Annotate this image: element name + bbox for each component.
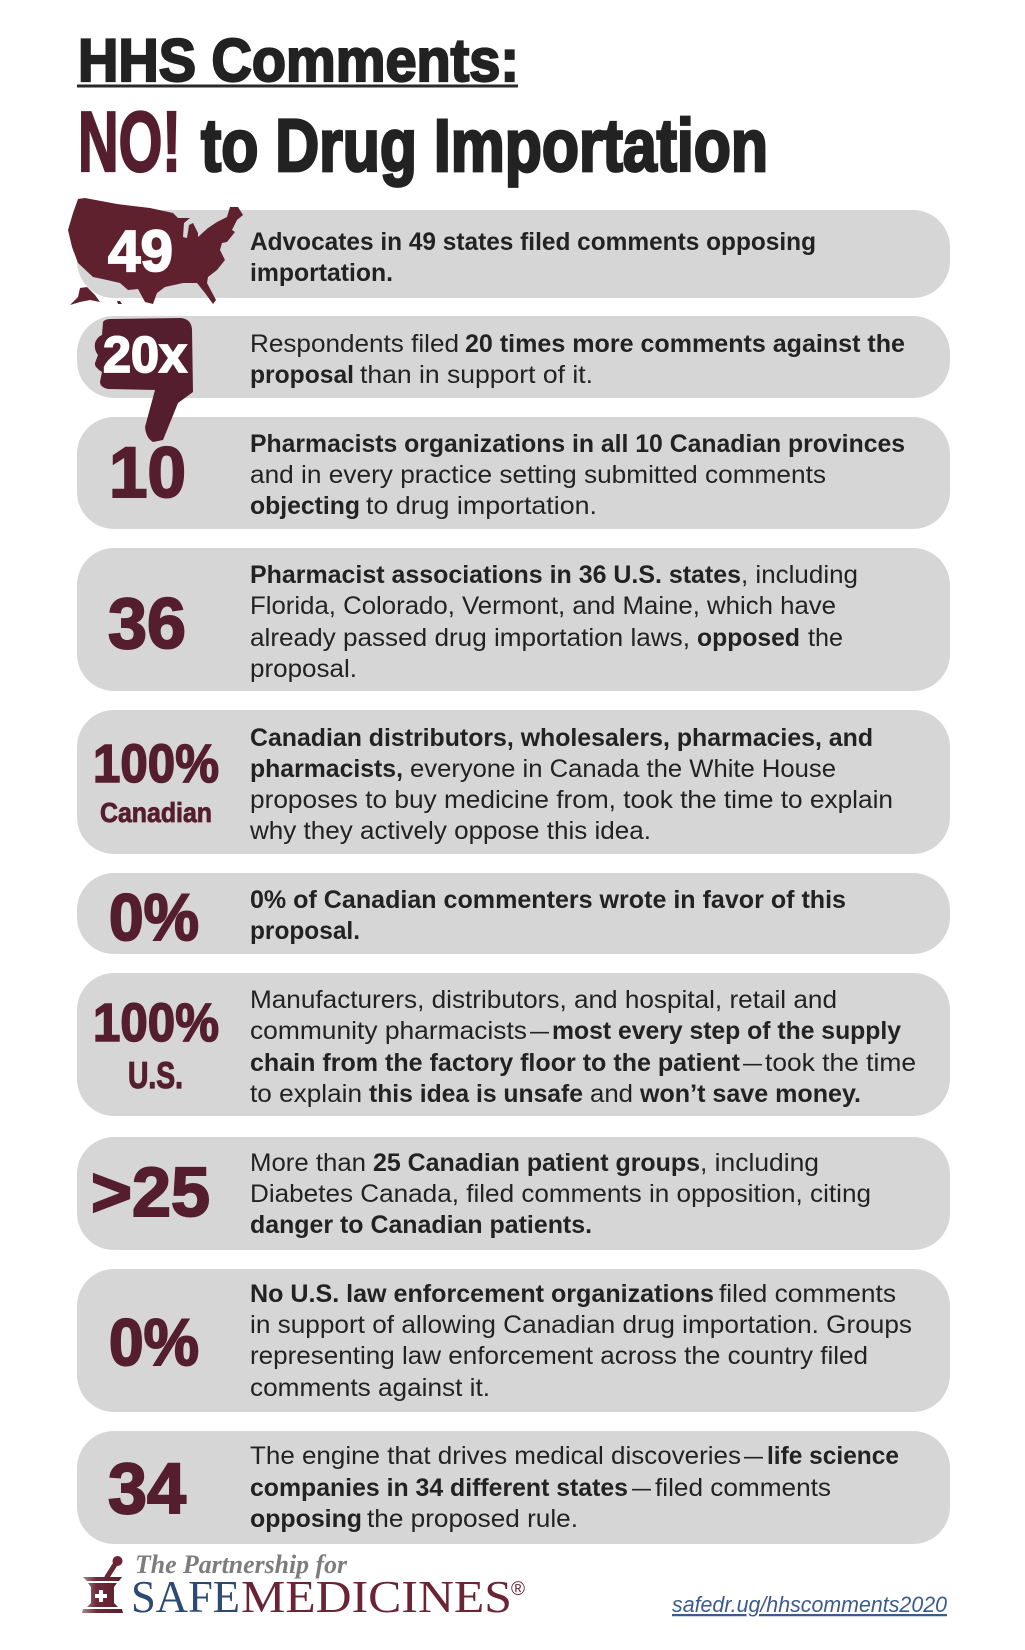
panel: 36 U.S. states: [77, 548, 950, 691]
big number: 0%: 0%: [109, 880, 199, 954]
text: supply chain: won’t save money.: [639, 1080, 861, 1108]
text: supply chain: Manufacturers, distributors, and hospital, retail and: [250, 986, 837, 1014]
text: 0% of Canadian commenters: [250, 886, 846, 945]
text: life science companies: filed comments: [655, 1474, 831, 1502]
text: 10 provinces: Pharmacists organizations in all 10 Canadian provinces: [250, 430, 905, 458]
text: life science companies: The engine that drives medical discoveries: [250, 1442, 741, 1470]
panel: 10 Canadian provinces: [77, 417, 950, 529]
logo text: registered mark: ®: [511, 1579, 525, 1600]
text: supply chain: —: [530, 1017, 549, 1045]
text: supply chain: and: [590, 1080, 633, 1108]
heading: NO! to Drug Importation: to Drug Importation: [201, 104, 768, 187]
text: law enforcement: representing law enforcement across the country filed: [250, 1342, 868, 1370]
text: life science companies: —: [744, 1442, 763, 1470]
text: patient groups: 25 Canadian patient groups: [373, 1149, 700, 1177]
text: 10 provinces: and in every practice setting submitted comments: [250, 461, 826, 489]
big number: >25: >25: [91, 1153, 210, 1231]
text: Canadian distributors: pharmacists,: [250, 755, 403, 783]
text: 36 states: opposed: [697, 624, 800, 652]
text: 0% of Canadian commenters: 0% of Canadian commenters wrote in favor of this: [250, 886, 846, 914]
text: Canadian distributors: why they actively oppose this idea.: [249, 817, 651, 845]
panel: law enforcement: [77, 1269, 950, 1412]
text: patient groups: More than: [250, 1149, 366, 1177]
big number: 10: 10: [109, 434, 186, 513]
text: 20 times more: than in support of it.: [360, 361, 593, 389]
panel: 20 times more comments: [77, 316, 950, 442]
text: supply chain: chain from the factory floor to the patient: [250, 1049, 741, 1077]
big number: 0%: 0%: [109, 1305, 199, 1379]
text: law enforcement: comments against it.: [250, 1374, 490, 1402]
text: law enforcement: in support of allowing Canadian drug importation. Groups: [250, 1311, 912, 1339]
text: life science companies: —: [632, 1474, 651, 1502]
heading: NO! to Drug Importation: [78, 95, 768, 190]
text: supply chain: community pharmacists: [250, 1017, 527, 1045]
text: 49 states: importation.: [250, 259, 393, 287]
big number: 34: 34: [108, 1450, 186, 1529]
text: law enforcement: No U.S. law enforcement organizations: [250, 1280, 714, 1308]
link: safedr.ug/hhscomments2020: safedr.ug/hhscomments2020: [672, 1592, 947, 1617]
text: patient groups: danger to Canadian patients.: [250, 1211, 592, 1239]
text: 49 states: Advocates in 49 states filed comments opposing: [250, 228, 816, 256]
text: life science companies: companies in 34 different states: [250, 1474, 628, 1502]
text: Canadian distributors: [249, 724, 893, 845]
logo text: MEDICINES: MEDICINES: [241, 1571, 512, 1622]
panel: 100% Canadian: [77, 710, 950, 854]
panel: 34 states life science: [77, 1431, 950, 1544]
text: 36 states: Pharmacist associations in 36 U.S. states: [250, 561, 741, 589]
big number: 36: 36: [108, 585, 186, 664]
text: 36 states: [250, 561, 858, 683]
text: law enforcement: [250, 1280, 912, 1402]
text: 36 states: , including: [741, 561, 858, 589]
logo: The Partnership for Safe Medicines: [82, 1550, 525, 1622]
text: 10 provinces: to drug importation.: [366, 492, 597, 520]
big number: 100% Canadian: [93, 734, 219, 828]
text: patient groups: Diabetes Canada, filed comments in opposition, citing: [250, 1180, 871, 1208]
text: 20 times more: proposal: [250, 361, 354, 389]
text: law enforcement: filed comments: [719, 1280, 896, 1308]
text: patient groups: , including: [700, 1149, 819, 1177]
text: Canadian distributors: Canadian distributors, wholesalers, pharmacies, and: [250, 724, 873, 752]
big number: 100% Canadian: 100%: [93, 734, 219, 794]
text: 36 states: Florida, Colorado, Vermont, and Maine, which have: [250, 592, 836, 620]
text: Canadian distributors: everyone in Canada the White House: [410, 755, 836, 783]
text: supply chain: most every step of the supply: [552, 1017, 901, 1045]
panel: 49 states: [68, 198, 950, 305]
icon: thumbs down: [95, 318, 193, 442]
logo text: SAFE: SAFE: [131, 1571, 240, 1622]
text: Canadian distributors: proposes to buy medicine from, took the time to explain: [250, 786, 893, 814]
panel: 0% Canadian commenters: [77, 873, 950, 954]
text: supply chain: took the time: [765, 1049, 916, 1077]
big number: 100% Canadian: Canadian: [100, 797, 212, 828]
big number: 100% U.S.: [93, 993, 219, 1096]
text: 20 times more: Respondents filed: [250, 330, 459, 358]
icon: map of the United States: [68, 198, 243, 305]
text: supply chain: [250, 986, 916, 1108]
heading: HHS Comments: HHS Comments:: [78, 27, 519, 94]
big number: 100% U.S.: U.S.: [128, 1055, 183, 1096]
text: 20 times more: [250, 330, 905, 389]
big number: 20x: 20x: [103, 326, 187, 383]
text: supply chain: to explain: [250, 1080, 362, 1108]
text: life science companies: opposing: [250, 1505, 362, 1533]
panel: more than 25 patient groups: [77, 1137, 950, 1250]
big number: 49: 49: [108, 219, 173, 284]
text: 49 states: [250, 228, 816, 287]
logo text: The Partnership for: The Partnership for: [135, 1550, 348, 1579]
panel: 100% U.S.: [77, 973, 950, 1116]
big number: 100% U.S.: 100%: [93, 993, 219, 1053]
text: 0% of Canadian commenters: proposal.: [250, 917, 360, 945]
text: life science companies: the proposed rule.: [367, 1505, 578, 1533]
text: supply chain: —: [743, 1049, 762, 1077]
text: 10 provinces: objecting: [250, 492, 360, 520]
text: life science companies: [250, 1442, 899, 1533]
title: [77, 27, 768, 190]
text: life science companies: life science: [767, 1442, 899, 1470]
text: 36 states: already passed drug importation laws,: [250, 624, 690, 652]
text: 36 states: proposal.: [250, 655, 357, 683]
heading: NO! to Drug Importation: NO!: [78, 95, 181, 190]
text: supply chain: this idea is unsafe: [369, 1080, 583, 1108]
text: 36 states: the: [808, 624, 843, 652]
icon: mortar and pestle: [82, 1556, 123, 1613]
text: 10 provinces: [250, 430, 905, 520]
text: 20 times more: 20 times more comments against the: [465, 330, 905, 358]
text: patient groups: [250, 1149, 871, 1239]
